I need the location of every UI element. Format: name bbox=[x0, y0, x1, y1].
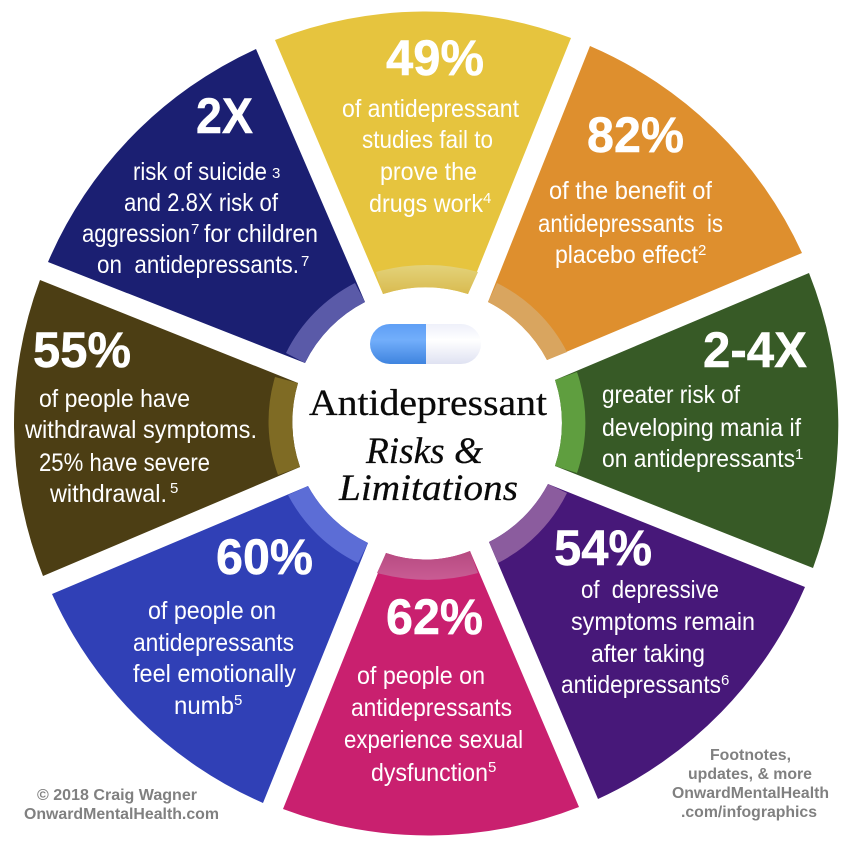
magenta inner ring bbox=[377, 551, 478, 580]
description: developing mania if bbox=[602, 414, 801, 442]
description: antidepressants bbox=[561, 671, 721, 699]
title bbox=[309, 383, 548, 509]
stat 82%: 82% bbox=[587, 107, 684, 163]
description bbox=[342, 95, 519, 218]
description: antidepressants bbox=[351, 694, 512, 722]
panel: 54% symptoms remain (purple) bbox=[489, 484, 805, 799]
footnotes note: OnwardMentalHealth bbox=[672, 785, 829, 802]
blue sector bbox=[52, 486, 368, 803]
description: 5 bbox=[488, 759, 496, 776]
copyright credit bbox=[24, 787, 219, 823]
brown sector bbox=[14, 280, 300, 576]
description bbox=[82, 158, 318, 279]
description: withdrawal symptoms. bbox=[24, 416, 257, 444]
title: Risks & bbox=[365, 431, 483, 472]
stat 54%: 54% bbox=[554, 520, 652, 576]
description: experience sexual bbox=[344, 726, 523, 754]
stat 55%: 55% bbox=[33, 322, 131, 378]
navy inner ring bbox=[286, 283, 365, 363]
description: symptoms remain bbox=[571, 608, 755, 636]
description bbox=[602, 381, 803, 473]
description bbox=[561, 576, 755, 699]
description: greater risk of bbox=[602, 381, 740, 409]
description: of depressive bbox=[581, 576, 719, 604]
panel: 49% studies fail (yellow) bbox=[275, 12, 571, 294]
description bbox=[133, 597, 296, 720]
yellow sector bbox=[275, 12, 571, 294]
description: antidepressants bbox=[133, 629, 294, 657]
description: antidepressants is bbox=[538, 210, 723, 238]
description: drugs work bbox=[369, 190, 483, 218]
purple inner ring bbox=[489, 484, 567, 563]
description: of people on bbox=[357, 662, 485, 690]
stat 49%: 49% bbox=[386, 30, 484, 86]
description: 6 bbox=[721, 672, 729, 689]
footnotes note: .com/infographics bbox=[681, 804, 817, 821]
footnotes note bbox=[672, 747, 829, 821]
description: of the benefit of bbox=[549, 177, 712, 205]
panel: 60% emotionally numb (blue) bbox=[52, 486, 368, 803]
yellow inner ring bbox=[376, 265, 478, 294]
stat 2-4X: 2-4X bbox=[703, 322, 807, 378]
description: 2 bbox=[698, 242, 706, 259]
green inner ring bbox=[555, 372, 585, 473]
description: 7 bbox=[191, 221, 199, 238]
green sector bbox=[555, 273, 838, 568]
description bbox=[24, 385, 257, 508]
orange inner ring bbox=[488, 283, 567, 360]
orange sector bbox=[488, 46, 802, 360]
navy sector bbox=[48, 49, 365, 363]
description: withdrawal. bbox=[49, 480, 167, 508]
stat 60%: 60% bbox=[216, 529, 313, 585]
description: of people have bbox=[39, 385, 190, 413]
panel: 62% sexual dysfunction (magenta) bbox=[283, 551, 579, 835]
description: on antidepressants. bbox=[97, 251, 299, 279]
stat 62%: 62% bbox=[386, 589, 483, 645]
description: 25% have severe bbox=[39, 449, 210, 477]
description: 7 bbox=[301, 253, 309, 270]
title: Antidepressant bbox=[309, 383, 548, 424]
description: 1 bbox=[795, 446, 803, 463]
stat 2X: 2X bbox=[196, 88, 253, 144]
panel: 55% withdrawal (brown) bbox=[14, 280, 300, 576]
description bbox=[344, 662, 523, 787]
description: 4 bbox=[483, 190, 491, 207]
copyright credit: © 2018 Craig Wagner bbox=[37, 787, 197, 804]
description: placebo effect bbox=[555, 241, 698, 269]
title: Limitations bbox=[338, 468, 518, 509]
description: 5 bbox=[170, 480, 178, 497]
copyright credit: OnwardMentalHealth.com bbox=[24, 806, 219, 823]
magenta sector bbox=[283, 551, 579, 835]
panel: 82% placebo (orange) bbox=[488, 46, 802, 360]
description: and 2.8X risk of bbox=[124, 189, 278, 217]
description: studies fail to bbox=[362, 126, 493, 154]
description: 3 bbox=[272, 165, 280, 182]
icon: capsule pill bbox=[370, 324, 481, 364]
blue inner ring bbox=[288, 486, 368, 563]
description: risk of suicide bbox=[133, 158, 267, 186]
description: dysfunction bbox=[371, 759, 488, 787]
description: feel emotionally bbox=[133, 660, 296, 688]
description: of people on bbox=[148, 597, 276, 625]
brown inner ring bbox=[269, 377, 300, 475]
description bbox=[538, 177, 723, 269]
description: 5 bbox=[234, 692, 242, 709]
description: on antidepressants bbox=[602, 445, 795, 473]
description: aggression bbox=[82, 220, 190, 248]
purple sector bbox=[489, 484, 805, 799]
description: of antidepressant bbox=[342, 95, 519, 123]
description: prove the bbox=[380, 158, 477, 186]
footnotes note: Footnotes, bbox=[710, 747, 791, 764]
description: for children bbox=[204, 220, 318, 248]
footnotes note: updates, & more bbox=[688, 766, 812, 783]
description: after taking bbox=[591, 640, 705, 668]
description: numb bbox=[174, 692, 234, 720]
panel: 2X suicide risk (navy) bbox=[48, 49, 365, 363]
panel: 2-4X mania (green) bbox=[555, 273, 838, 568]
